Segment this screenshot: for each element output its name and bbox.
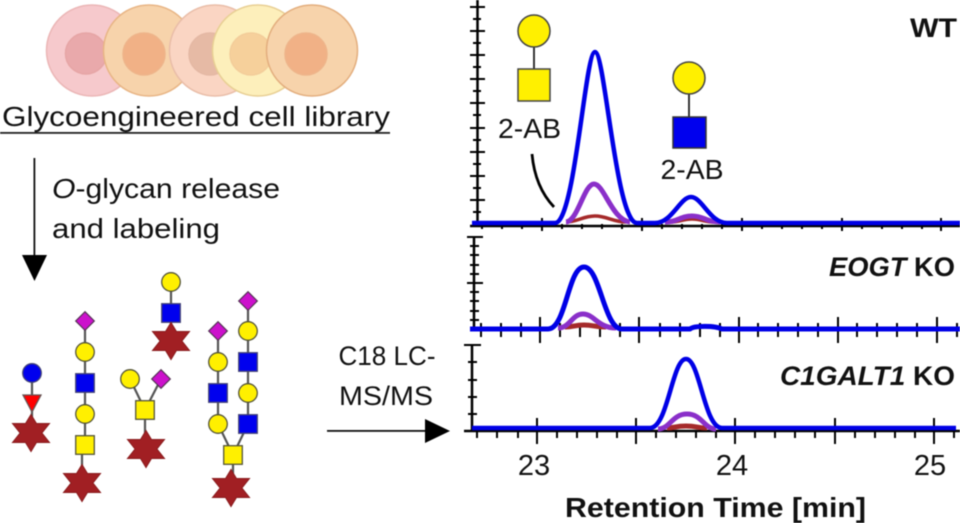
heading: cell library: Glycoengineered cell library xyxy=(2,101,390,132)
label: C1GALT1 KO: C1GALT1 KO xyxy=(780,361,955,391)
text: release and labeling: O-glycan release xyxy=(52,173,280,204)
text: release and labeling xyxy=(52,173,280,244)
arrow: release step xyxy=(22,158,47,281)
label: WT: WT xyxy=(910,13,958,43)
heading underline xyxy=(0,132,390,134)
glycan 5 xyxy=(209,292,257,506)
label: EOGT KO: EOGT KO xyxy=(829,252,955,282)
glycan icon: galactose-GalNAc xyxy=(518,15,550,101)
pointer curve xyxy=(532,154,554,207)
glycan icon: galactose-GlcNAc xyxy=(673,62,706,148)
label: 2-AB left: 2-AB xyxy=(498,113,561,144)
x axis tick labels: 23 xyxy=(518,450,550,482)
arrow: to chromatograms xyxy=(327,419,450,443)
x axis tick labels xyxy=(518,450,946,482)
chromatogram: C1GALT1 KO xyxy=(464,345,960,444)
x axis tick labels: 25 xyxy=(914,450,946,482)
glycan 4 xyxy=(152,273,190,360)
glycan structures xyxy=(12,273,257,506)
glycan 1 xyxy=(12,364,50,452)
text: release and labeling: and labeling xyxy=(52,213,220,244)
x axis title: Retention Time [min] xyxy=(565,492,866,523)
text: LC-MS method: MS/MS xyxy=(339,381,433,411)
glycan 2 xyxy=(64,312,100,502)
glycan 3 xyxy=(121,370,170,468)
text: LC-MS method: C18 LC- xyxy=(338,341,436,371)
label: 2-AB right: 2-AB xyxy=(660,154,724,185)
chromatogram: WT xyxy=(470,0,960,231)
x axis tick labels: 24 xyxy=(716,450,748,482)
cell library illustration xyxy=(46,5,358,96)
chromatogram: EOGT KO xyxy=(467,237,960,343)
text: LC-MS method xyxy=(338,341,436,411)
